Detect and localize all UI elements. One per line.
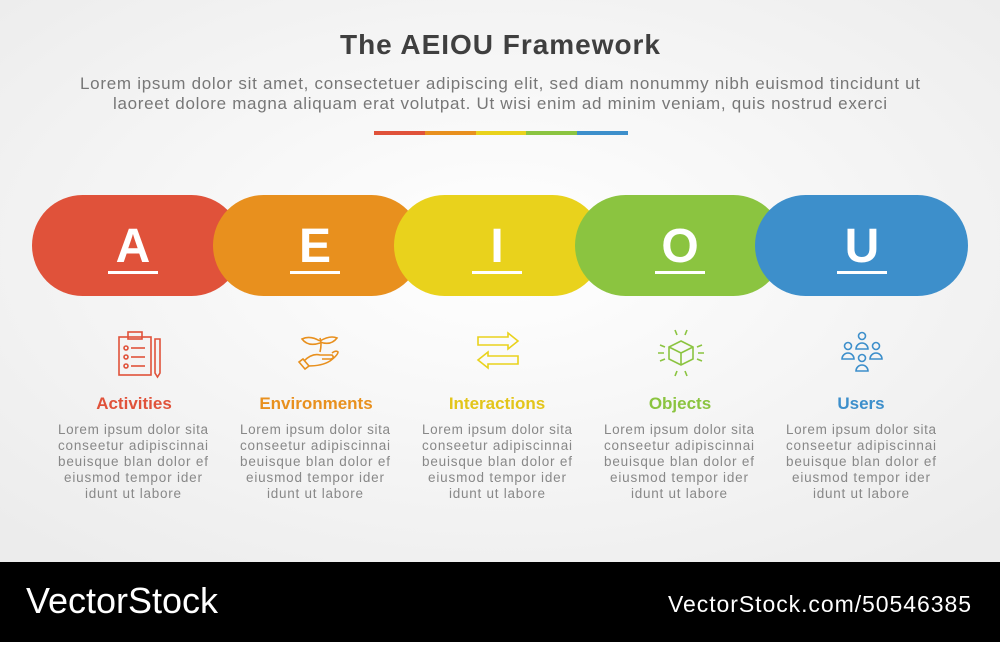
labels: Objects [649,394,711,413]
body texts: eiusmod tempor ider [610,470,748,485]
body texts: beuisque blan dolor ef [786,454,936,469]
body texts: conseetur adipiscinnai [422,438,572,453]
pill: E: E [299,220,331,273]
body texts: Lorem ipsum dolor sita [240,422,390,437]
subtitle text [80,74,920,113]
body texts: idunt ut labore [449,486,545,501]
body texts: beuisque blan dolor ef [604,454,754,469]
pill: U: U [845,220,879,273]
body texts: Lorem ipsum dolor sita [786,422,936,437]
labels: Activities [96,394,172,413]
pill: A: A [116,220,150,273]
footer bar: VectorStock.com/50546385 [668,591,971,617]
body texts: Lorem ipsum dolor sita [422,422,572,437]
pill: A [32,195,242,296]
footer bar [0,562,1000,642]
body texts: Lorem ipsum dolor sita [604,422,754,437]
icon: clipboard [119,332,160,377]
subtitle text: laoreet dolore magna aliquam erat volutpat. Ut wisi enim ad minim veniam, quis nostrud exerci [113,94,887,113]
body texts: eiusmod tempor ider [64,470,202,485]
icon: glowing cube [658,330,704,376]
labels: Users [837,394,885,413]
icon: hand plant [299,337,338,369]
body texts: beuisque blan dolor ef [58,454,208,469]
body texts: conseetur adipiscinnai [58,438,208,453]
pill: U [755,195,968,296]
color bar [374,131,628,135]
body texts: beuisque blan dolor ef [422,454,572,469]
body texts: Lorem ipsum dolor sita [58,422,208,437]
body texts: idunt ut labore [85,486,181,501]
footer bar: VectorStock [26,580,219,621]
labels [96,394,885,413]
body texts: eiusmod tempor ider [792,470,930,485]
body texts: beuisque blan dolor ef [240,454,390,469]
labels: Environments [259,394,373,413]
icon: users [842,332,882,371]
body texts: idunt ut labore [631,486,727,501]
body texts: conseetur adipiscinnai [240,438,390,453]
body texts: idunt ut labore [267,486,363,501]
pill: O [575,195,784,296]
pill: E [213,195,422,296]
body texts [58,422,936,501]
pill: I: I [490,220,504,273]
body texts: eiusmod tempor ider [428,470,566,485]
subtitle text: Lorem ipsum dolor sit amet, consectetuer adipiscing elit, sed diam nonummy nibh euismod tincidunt ut [80,74,920,93]
body texts: conseetur adipiscinnai [604,438,754,453]
body texts: eiusmod tempor ider [246,470,384,485]
pill: I [394,195,603,296]
icon: arrows [478,333,518,368]
pill: O: O [661,220,699,273]
body texts: idunt ut labore [813,486,909,501]
labels: Interactions [449,394,545,413]
title: The AEIOU Framework [340,29,660,60]
body texts: conseetur adipiscinnai [786,438,936,453]
